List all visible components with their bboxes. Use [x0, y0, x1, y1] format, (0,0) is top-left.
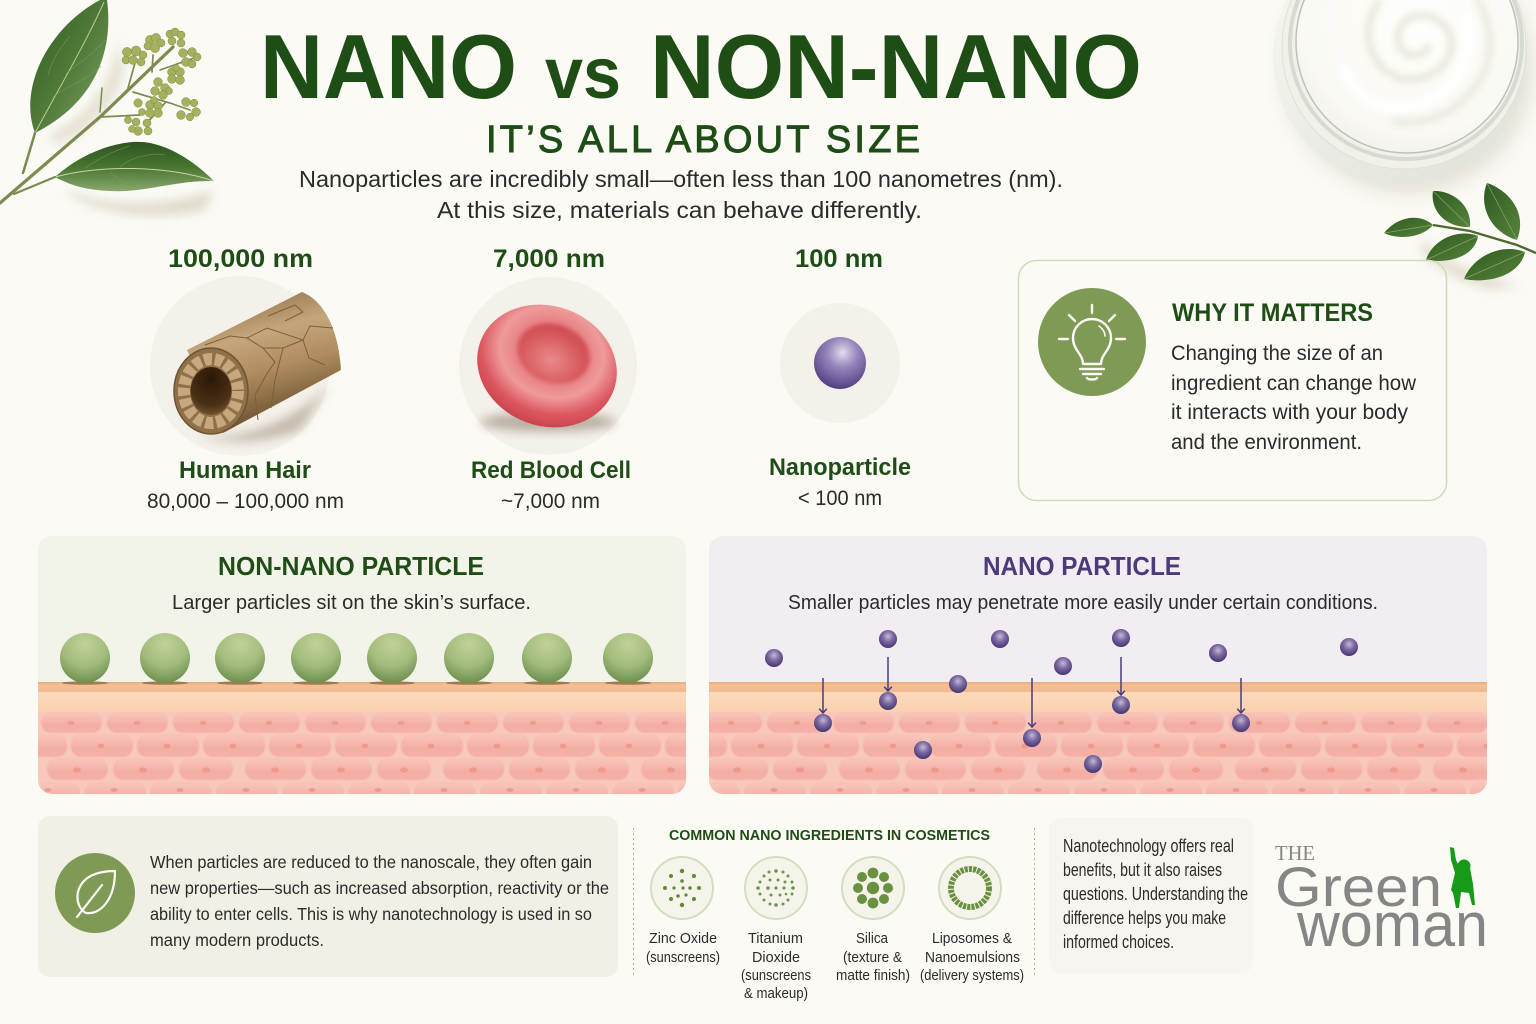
size comparison: human hair: 80,000 – 100,000 nm	[147, 490, 344, 513]
panel: common nano ingredients	[646, 828, 1024, 1002]
panel: nanoscale properties	[38, 816, 618, 977]
sprig: bottom right	[1384, 183, 1536, 290]
size comparison: nanoparticle	[769, 245, 911, 510]
panel: why it matters: Changing the size of an	[1171, 341, 1383, 365]
panel: nano particle	[709, 536, 1487, 794]
icon: light bulb	[1038, 288, 1146, 396]
flower buds	[122, 28, 201, 135]
logo: The Green Woman: woman	[1296, 891, 1488, 960]
skin layers: non-nano	[38, 682, 686, 794]
panel: nanoscale properties: When particles are reduced to the nanoscale, they often gain	[150, 852, 592, 872]
panel: closing note: benefits, but it also raises	[1063, 859, 1222, 880]
panel: non-nano particle: NON-NANO PARTICLE	[218, 551, 484, 581]
size comparison: human hair: Human Hair	[179, 457, 311, 484]
ingredient: zinc oxide: (sunscreens)	[646, 950, 720, 966]
ingredient: liposomes: (delivery systems)	[920, 968, 1024, 984]
ingredient: titanium dioxide: Dioxide	[752, 950, 800, 966]
panel: nanoscale properties: new properties—such as increased absorption, reactivity or the	[150, 878, 609, 898]
size comparison: red blood cell: 7,000 nm	[493, 245, 605, 273]
panel: non-nano particle	[38, 536, 686, 794]
subtitle: IT’S ALL ABOUT SIZE	[486, 119, 920, 161]
lower leaf	[55, 142, 214, 191]
size comparison: nanoparticle: 100 nm	[795, 245, 883, 273]
panel: closing note	[1049, 818, 1253, 973]
panel: nanoscale properties: ability to enter cells. This is why nanotechnology is used in so	[150, 904, 592, 924]
panel: closing note: questions. Understanding the	[1063, 883, 1248, 904]
logo: The Green Woman: THE	[1275, 841, 1315, 865]
ingredient: liposomes: Nanoemulsions	[925, 950, 1020, 966]
logo: The Green Woman	[1275, 841, 1488, 960]
cream jar: top right	[1273, 0, 1534, 194]
ingredient: liposomes: Liposomes &	[932, 931, 1012, 947]
penetration arrows	[823, 657, 1241, 727]
skin layers: nano	[709, 682, 1487, 794]
ingredient: titanium dioxide: Titanium	[748, 931, 803, 947]
intro text: Nanoparticles are incredibly small—often less than 100 nanometres (nm).	[299, 166, 1063, 192]
ingredient: silica: (texture &	[843, 950, 902, 966]
title: vs	[545, 34, 621, 114]
size comparison: red blood cell: Red Blood Cell	[471, 457, 631, 484]
ingredient: silica	[836, 857, 910, 984]
panel: nano particle: Smaller particles may penetrate more easily under certain conditions.	[788, 591, 1378, 614]
title: NANO	[260, 17, 517, 118]
icon: red blood cell	[460, 285, 634, 447]
size comparison: human hair: 100,000 nm	[168, 245, 313, 273]
size comparison: nanoparticle: < 100 nm	[798, 487, 882, 510]
size comparison: nanoparticle: Nanoparticle	[769, 454, 911, 481]
ingredient: liposomes	[920, 857, 1024, 984]
panel: closing note: difference helps you make	[1063, 907, 1226, 928]
small purple particles	[765, 629, 1358, 773]
panel: closing note: informed choices.	[1063, 931, 1174, 952]
size comparison: red blood cell	[459, 245, 637, 513]
ingredient: silica: Silica	[856, 931, 889, 947]
icon: nanoparticle sphere	[814, 337, 866, 389]
panel: why it matters: it interacts with your body	[1171, 400, 1408, 424]
size comparison: red blood cell: ~7,000 nm	[501, 490, 600, 513]
panel: closing note: Nanotechnology offers real	[1063, 835, 1234, 856]
panel: why it matters: and the environment.	[1171, 430, 1362, 454]
panel: nano particle: NANO PARTICLE	[983, 551, 1181, 581]
large green particles	[60, 633, 653, 685]
icon: leaf	[55, 853, 135, 933]
ingredient: titanium dioxide: (sunscreens	[741, 968, 811, 984]
logo: The Green Woman: Green	[1275, 855, 1442, 918]
icon: hair strand	[174, 292, 341, 442]
ingredient: titanium dioxide	[741, 857, 811, 1002]
panel: nanoscale properties: many modern products.	[150, 930, 324, 950]
upper leaf	[30, 0, 108, 133]
ingredient: zinc oxide: Zinc Oxide	[649, 931, 717, 947]
panel: why it matters	[1018, 260, 1446, 500]
panel: why it matters: WHY IT MATTERS	[1172, 299, 1373, 327]
logo figure	[1450, 847, 1475, 908]
intro text	[299, 166, 1063, 223]
botanical sprig: top left	[0, 0, 214, 216]
stems	[0, 47, 197, 203]
title: NON-NANO	[650, 17, 1142, 118]
title	[260, 17, 1142, 118]
panel: why it matters: ingredient can change how	[1171, 371, 1416, 395]
ingredient: silica: matte finish)	[836, 968, 910, 984]
ingredient: zinc oxide	[646, 857, 720, 966]
intro text: At this size, materials can behave differently.	[437, 197, 922, 223]
panel: non-nano particle: Larger particles sit on the skin’s surface.	[172, 591, 531, 614]
size comparison: human hair	[147, 245, 344, 513]
ingredient: titanium dioxide: & makeup)	[744, 986, 808, 1002]
panel: common nano ingredients: COMMON NANO INGREDIENTS IN COSMETICS	[669, 828, 990, 844]
